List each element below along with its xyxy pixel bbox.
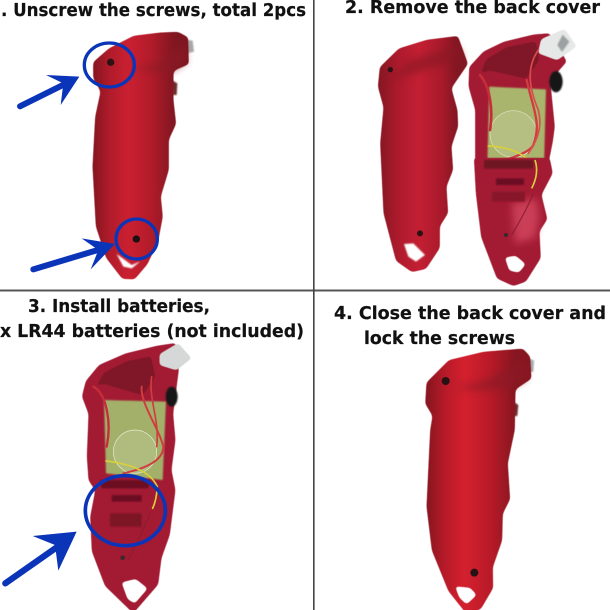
grid divider: horizontal: [0, 290, 610, 292]
panel: step 2 remove cover: [345, 0, 600, 287]
closed gauge: [424, 347, 534, 610]
battery compartment: [473, 157, 554, 287]
heading: step 4 second line: lock the screws: [364, 329, 515, 349]
callout circles and arrows: [20, 43, 157, 269]
heading: step 1: . Unscrew the screws, total 2pcs: [1, 1, 306, 21]
panel: step 1 unscrew: [1, 1, 306, 281]
heading: step 3: 3. Install batteries,: [28, 297, 210, 317]
opened gauge interior: [467, 27, 578, 170]
heading: battery note: x LR44 batteries (not included): [0, 322, 304, 342]
panel: step 4 close cover: [334, 304, 606, 610]
removed back cover: [377, 35, 469, 273]
panel: step 3 install batteries: [0, 297, 304, 610]
heading: step 4: 4. Close the back cover and: [334, 304, 606, 324]
gauge back view with screws: [91, 31, 194, 281]
callout circle and arrow: [5, 476, 165, 583]
wires: [480, 50, 540, 167]
grid divider: vertical: [313, 0, 315, 610]
black button: [549, 71, 563, 92]
opened gauge with batteries area: [81, 342, 193, 610]
circuit board: [487, 87, 546, 166]
pressure nozzle: [537, 27, 578, 62]
